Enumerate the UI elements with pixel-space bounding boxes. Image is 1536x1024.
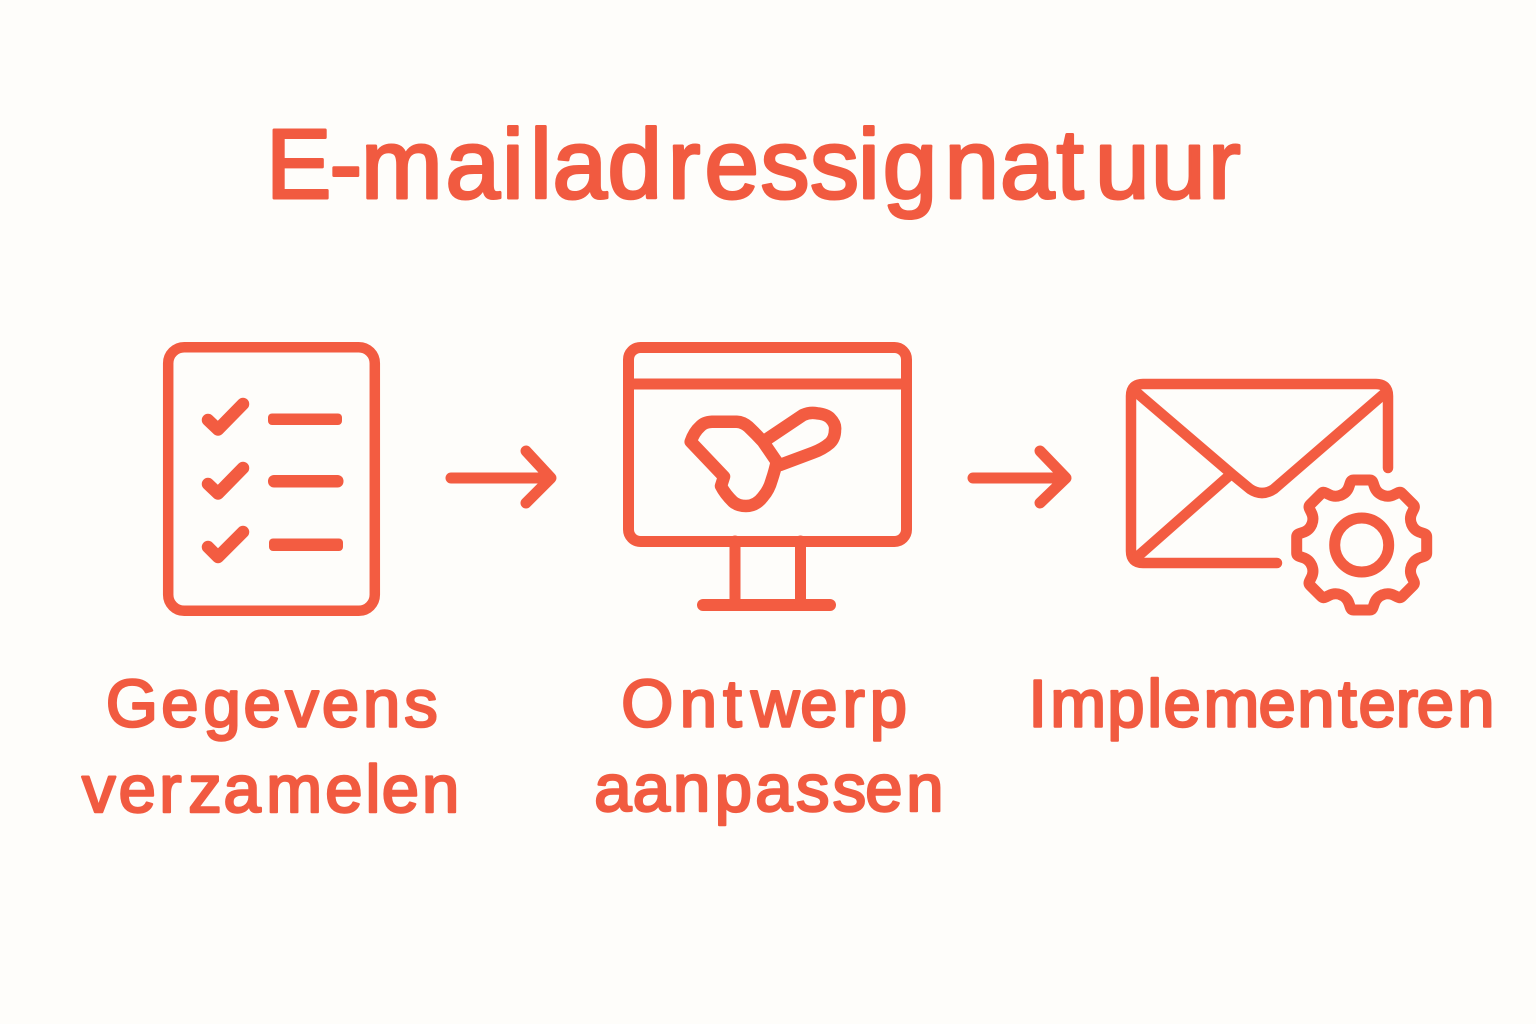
label: step two: aanpassen	[594, 751, 944, 826]
label: step two: Ontwerp	[621, 666, 907, 742]
icon: envelope with gear	[1131, 384, 1427, 610]
arrow: step one to step two	[451, 451, 551, 503]
title: E-mailadressignatuur	[266, 109, 1241, 219]
icon: monitor with paintbrush	[628, 348, 906, 605]
label: step one	[82, 666, 459, 827]
label: step three: Implementeren	[1028, 666, 1495, 742]
label: step one: Gegevens	[106, 666, 438, 742]
label: step two	[594, 666, 944, 826]
icon: checklist document	[168, 347, 375, 611]
label: step one: verzamelen	[82, 752, 459, 827]
arrow: step two to step three	[973, 451, 1066, 503]
